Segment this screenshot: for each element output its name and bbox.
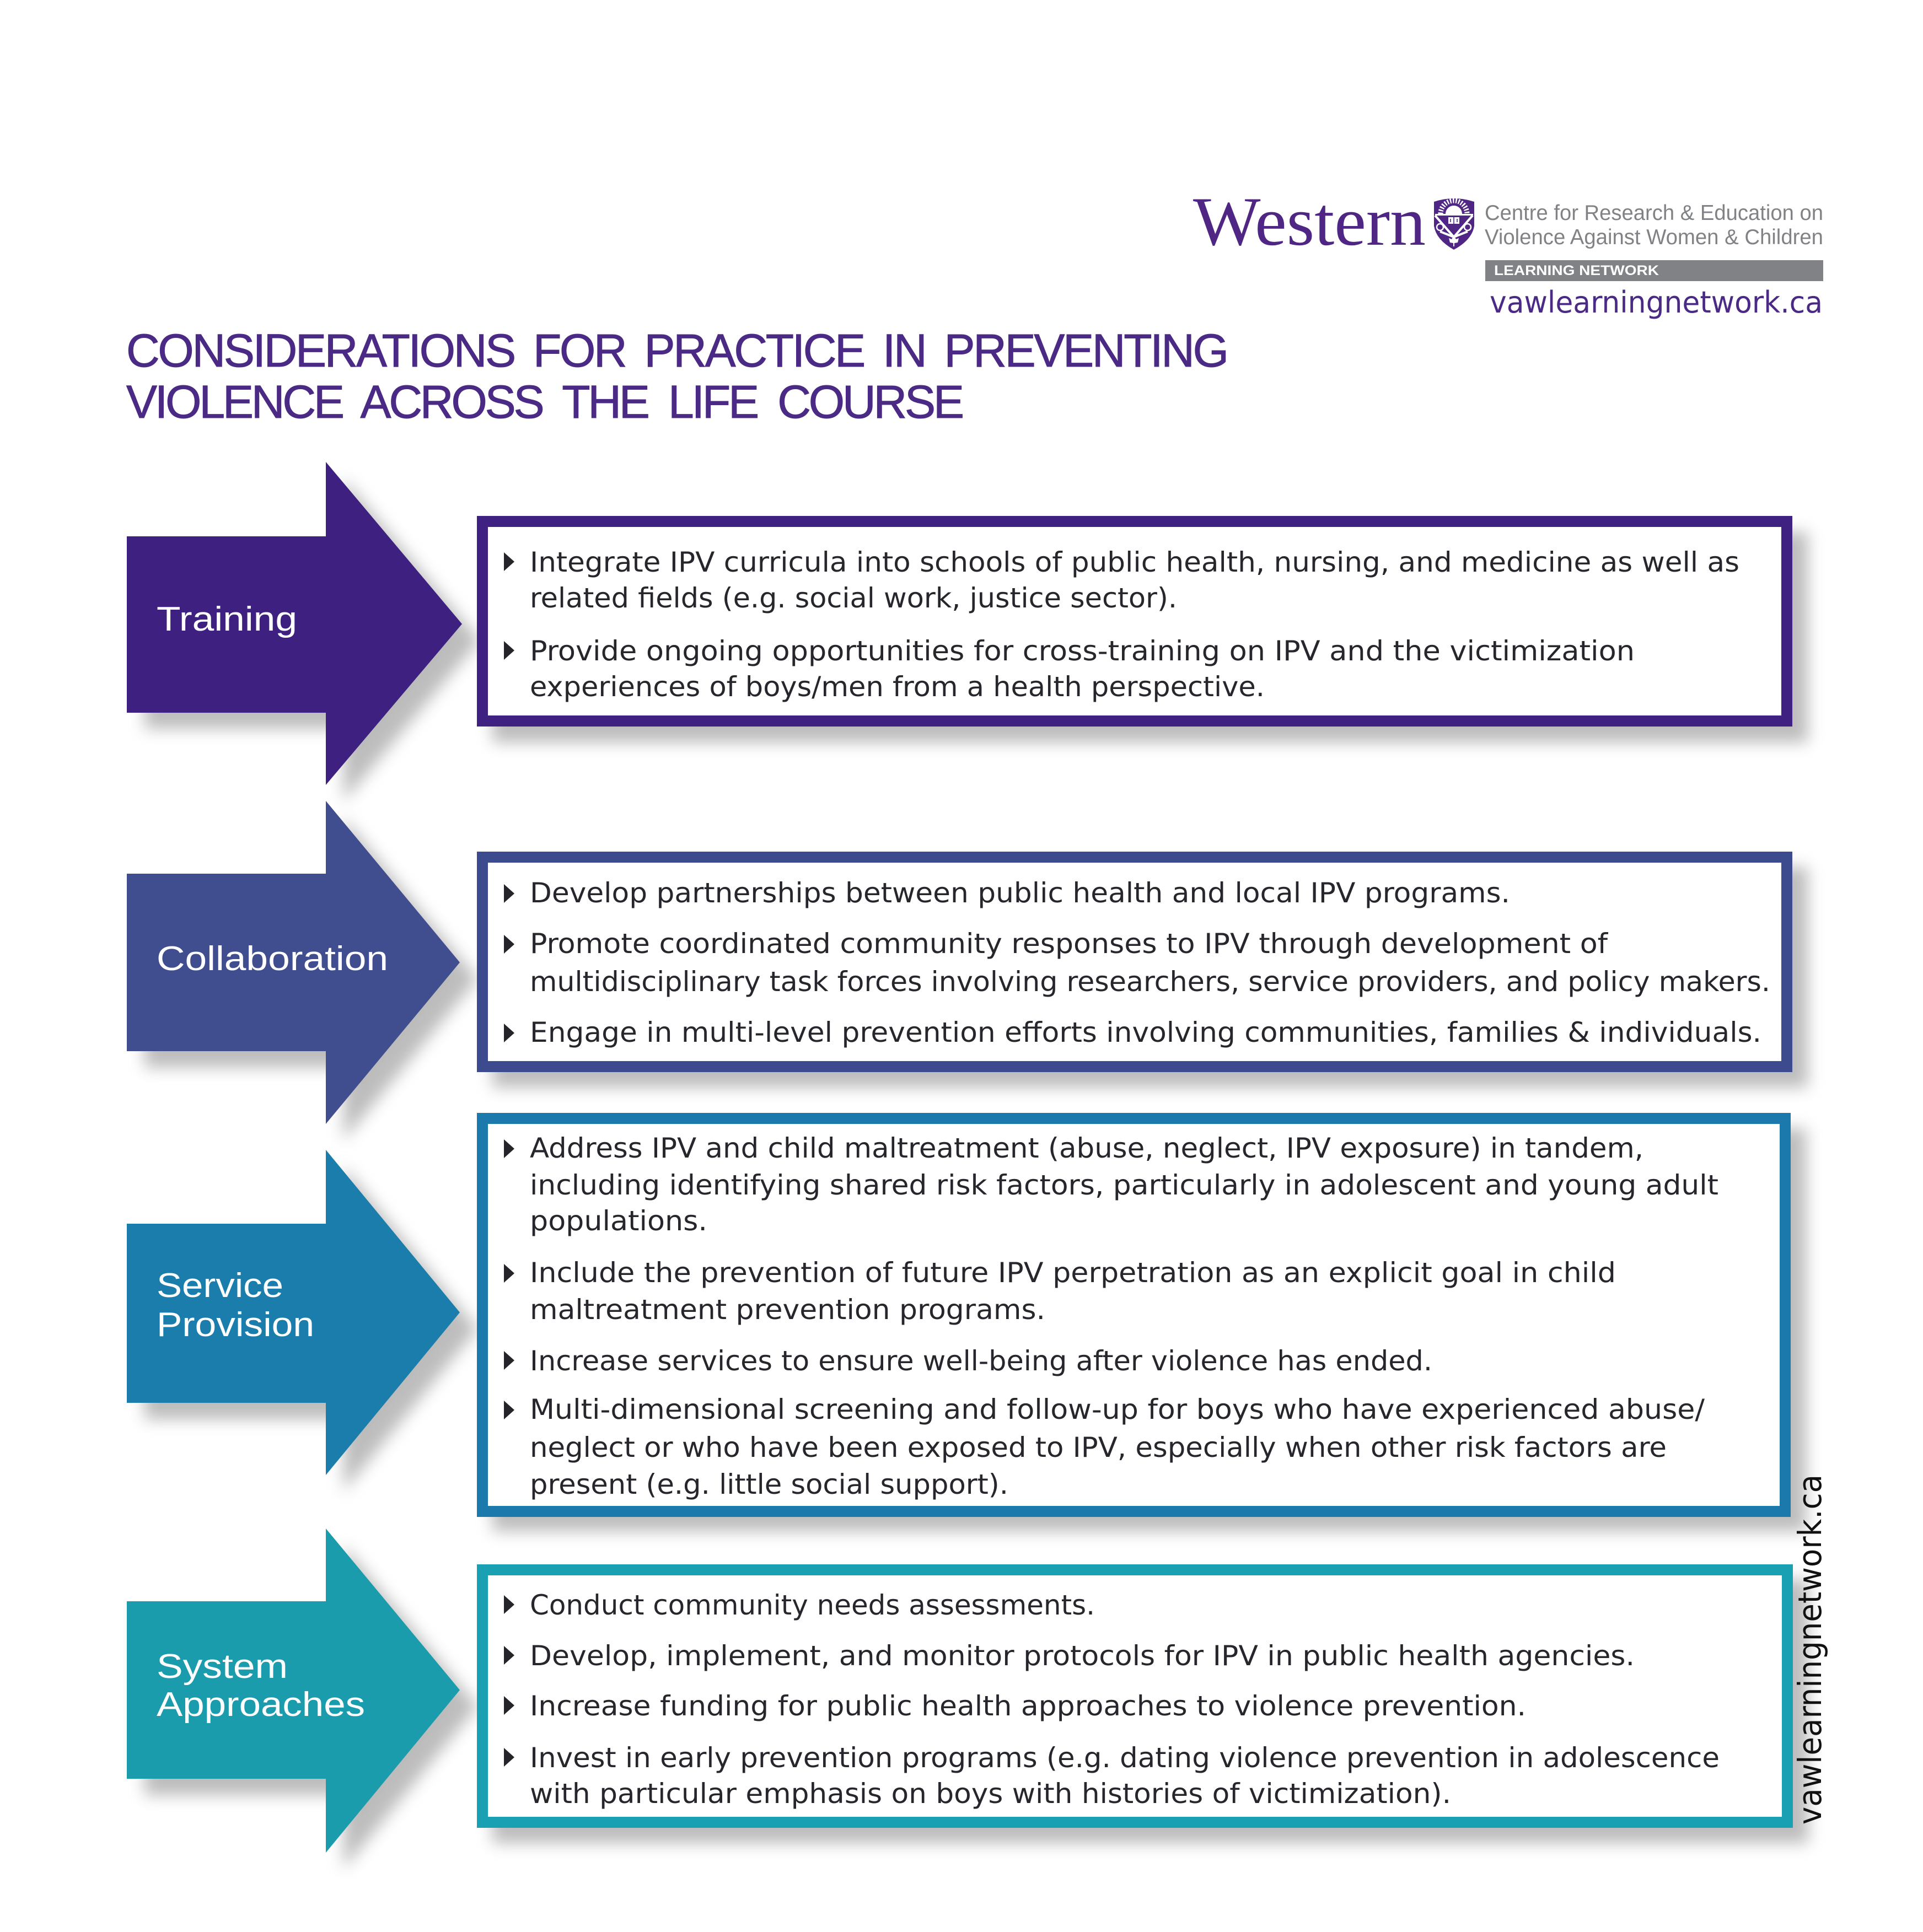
arrow: Service Provision: Service (157, 1267, 283, 1305)
learning network bar (1485, 260, 1823, 281)
bullet list: Service Provision (504, 1132, 1718, 1500)
bullet list: Service Provision: Address IPV and child maltreatment (abuse, neglect, IPV exposure) in tandem, (530, 1132, 1643, 1164)
bullet list: Collaboration: multidisciplinary task forces involving researchers, service providers, and policy makers. (530, 966, 1770, 998)
bullet list: Service Provision: Increase services to ensure well-being after violence has ended. (530, 1345, 1432, 1377)
bullet list: Collaboration: Develop partnerships between public health and local IPV programs. (530, 877, 1510, 909)
title (126, 325, 1229, 428)
bullet list: Training: experiences of boys/men from a health perspective. (530, 671, 1265, 703)
arrow: Collaboration: Collaboration (157, 940, 388, 978)
bullet list: System Approaches: Invest in early prevention programs (e.g. dating violence prevention in adolescence (530, 1742, 1720, 1774)
panel: Service Provision (482, 1118, 1806, 1531)
bullet list: Service Provision: Include the prevention of future IPV perpetration as an explicit goal in child (530, 1257, 1616, 1289)
panel: Training (482, 521, 1808, 742)
bullet list: Collaboration (504, 877, 1770, 1048)
title: VIOLENCE ACROSS THE LIFE COURSE (126, 376, 964, 428)
organisation name: Centre for Research & Education on (1485, 201, 1823, 225)
logo: Western Centre for Research & Education (1193, 184, 1823, 320)
bullet list: Training: related fields (e.g. social work, justice sector). (530, 582, 1177, 614)
panel: System Approaches (482, 1570, 1808, 1843)
bullet list: Service Provision: maltreatment prevention programs. (530, 1294, 1045, 1326)
arrow: Training (127, 462, 480, 801)
bullet list: Service Provision: populations. (530, 1205, 707, 1237)
bullet list: Service Provision: neglect or who have been exposed to IPV, especially when other risk factors are (530, 1431, 1667, 1463)
website url: vawlearningnetwork.ca (1490, 285, 1823, 320)
arrow: Collaboration (127, 801, 477, 1140)
arrow: Service Provision: Provision (157, 1306, 314, 1344)
panel: Collaboration (482, 857, 1808, 1088)
bullet list: Service Provision: present (e.g. little social support). (530, 1468, 1008, 1500)
bullet list: System Approaches: Develop, implement, and monitor protocols for IPV in public health agencies. (530, 1640, 1635, 1672)
organisation name (1485, 201, 1823, 249)
arrow: System Approaches (127, 1529, 477, 1869)
bullet list: System Approaches: Increase funding for public health approaches to violence prevention. (530, 1690, 1526, 1722)
wordmark: Western: Western (1193, 184, 1426, 260)
bullet list: Training (504, 546, 1739, 703)
icon: Western crest shield (1434, 198, 1474, 250)
learning network bar: LEARNING NETWORK (1494, 263, 1659, 278)
bullet list: Service Provision: including identifying shared risk factors, particularly in adolescent and young adult (530, 1169, 1718, 1201)
bullet list: System Approaches: with particular emphasis on boys with histories of victimization). (530, 1778, 1451, 1810)
arrow: System Approaches: Approaches (157, 1686, 365, 1724)
bullet list: Service Provision: Multi-dimensional screening and follow-up for boys who have experienced abuse/ (530, 1393, 1705, 1425)
bullet list: System Approaches: Conduct community needs assessments. (530, 1589, 1095, 1621)
bullet list: System Approaches (504, 1589, 1720, 1810)
bullet list: Collaboration: Engage in multi-level prevention efforts involving communities, families & individuals. (530, 1016, 1761, 1048)
arrow: Service Provision (127, 1150, 477, 1492)
title: CONSIDERATIONS FOR PRACTICE IN PREVENTING (126, 325, 1229, 376)
bullet list: Collaboration: Promote coordinated community responses to IPV through development of (530, 928, 1608, 960)
vertical website url: vawlearningnetwork.ca (1791, 1474, 1829, 1825)
organisation name: Violence Against Women & Children (1485, 225, 1823, 249)
bullet list: Training: Integrate IPV curricula into schools of public health, nursing, and medicine as well as (530, 546, 1739, 578)
arrow: System Approaches: System (157, 1648, 288, 1686)
arrow: Training: Training (157, 600, 297, 638)
bullet list: Training: Provide ongoing opportunities for cross-training on IPV and the victimization (530, 635, 1635, 667)
